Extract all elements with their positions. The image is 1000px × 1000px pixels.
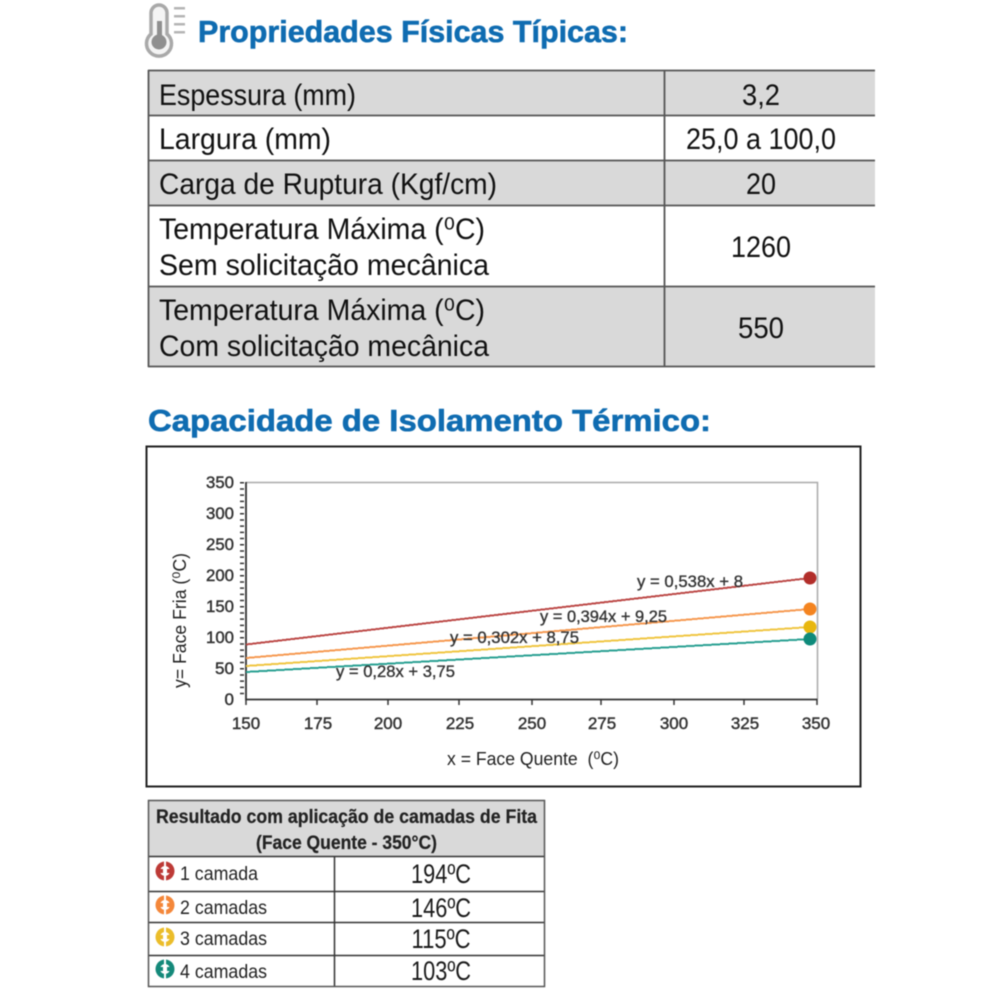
row: carga de ruptura [159, 168, 776, 201]
equation labels [336, 572, 743, 681]
x axis labels: 225 [446, 714, 474, 733]
row: carga de ruptura: 20 [746, 168, 776, 201]
equation labels: y = 0,28x + 3,75 [336, 662, 455, 681]
row: temperatura com solicitação: Com solicitação mecânica [159, 330, 490, 363]
y axis labels: 150 [206, 597, 234, 616]
row: 2 camadas [156, 893, 471, 923]
x axis labels: 350 [802, 714, 830, 733]
row: 1 camada [156, 859, 471, 889]
table header [156, 807, 537, 854]
heading: capacidade de isolamento: Capacidade de Isolamento Térmico: [148, 403, 711, 438]
equation labels: y = 0,302x + 8,75 [450, 628, 579, 647]
row: espessura [159, 79, 780, 112]
y axis labels: 50 [215, 659, 234, 678]
y axis labels: 100 [206, 628, 234, 647]
equation labels: y = 0,538x + 8 [637, 572, 743, 591]
table header: (Face Quente - 350°C) [256, 833, 437, 854]
row: 3 camadas: 3 camadas [180, 928, 267, 950]
row: temperatura com solicitação [159, 294, 784, 363]
x axis labels: 175 [304, 714, 332, 733]
row: 4 camadas: 103ºC [411, 956, 471, 986]
equation labels: y = 0,394x + 9,25 [540, 607, 667, 626]
y axis title: y= Face Fria (⁰C) [169, 553, 190, 688]
row: temperatura com solicitação: 550 [738, 312, 784, 345]
y axis labels [206, 473, 234, 709]
row: 1 camada: 1 camada [180, 863, 258, 885]
row: espessura: Espessura (mm) [159, 79, 356, 112]
row: 1 camada: 194ºC [411, 859, 471, 889]
table header: Resultado com aplicação de camadas de Fita [156, 807, 537, 828]
icon: thermometer [146, 5, 185, 56]
table: physical properties [148, 70, 875, 367]
row: temperatura sem solicitação: 1260 [731, 231, 791, 264]
row: 2 camadas: 2 camadas [180, 897, 267, 919]
row: largura [159, 123, 836, 156]
row: 3 camadas [156, 924, 470, 954]
x axis labels: 275 [588, 714, 616, 733]
row: temperatura sem solicitação: Sem solicitação mecânica [159, 249, 490, 282]
y axis labels: 350 [206, 473, 234, 492]
row: carga de ruptura: Carga de Ruptura (Kgf/cm) [159, 168, 497, 201]
x axis labels: 150 [232, 714, 260, 733]
x axis labels [232, 714, 830, 733]
row: 2 camadas: 146ºC [411, 893, 471, 923]
row: temperatura com solicitação: Temperatura Máxima (⁰C) [159, 294, 485, 327]
x axis labels: 200 [374, 714, 402, 733]
line: 3 camadas [246, 620, 816, 666]
y axis labels: 0 [225, 690, 234, 709]
row: largura: 25,0 a 100,0 [686, 123, 836, 156]
x axis title: x = Face Quente (⁰C) [447, 748, 619, 769]
y axis labels: 200 [206, 566, 234, 585]
row: temperatura sem solicitação [159, 213, 791, 282]
x axis labels: 250 [518, 714, 546, 733]
line: 2 camadas [246, 602, 816, 658]
panel: line chart [146, 446, 860, 786]
row: espessura: 3,2 [742, 79, 780, 112]
row: temperatura sem solicitação: Temperatura Máxima (⁰C) [159, 213, 485, 246]
line: 4 camadas [246, 632, 816, 672]
x axis labels: 300 [660, 714, 688, 733]
heading: propriedades físicas: Propriedades Físicas Típicas: [198, 14, 628, 49]
x axis labels: 325 [731, 714, 759, 733]
y axis labels: 300 [206, 504, 234, 523]
row: 3 camadas: 115ºC [412, 924, 470, 954]
row: 4 camadas: 4 camadas [180, 961, 267, 983]
y axis labels: 250 [206, 535, 234, 554]
table: results by layers [148, 800, 544, 986]
line: 1 camada [246, 572, 816, 644]
row: 4 camadas [156, 956, 471, 986]
row: largura: Largura (mm) [159, 123, 331, 156]
